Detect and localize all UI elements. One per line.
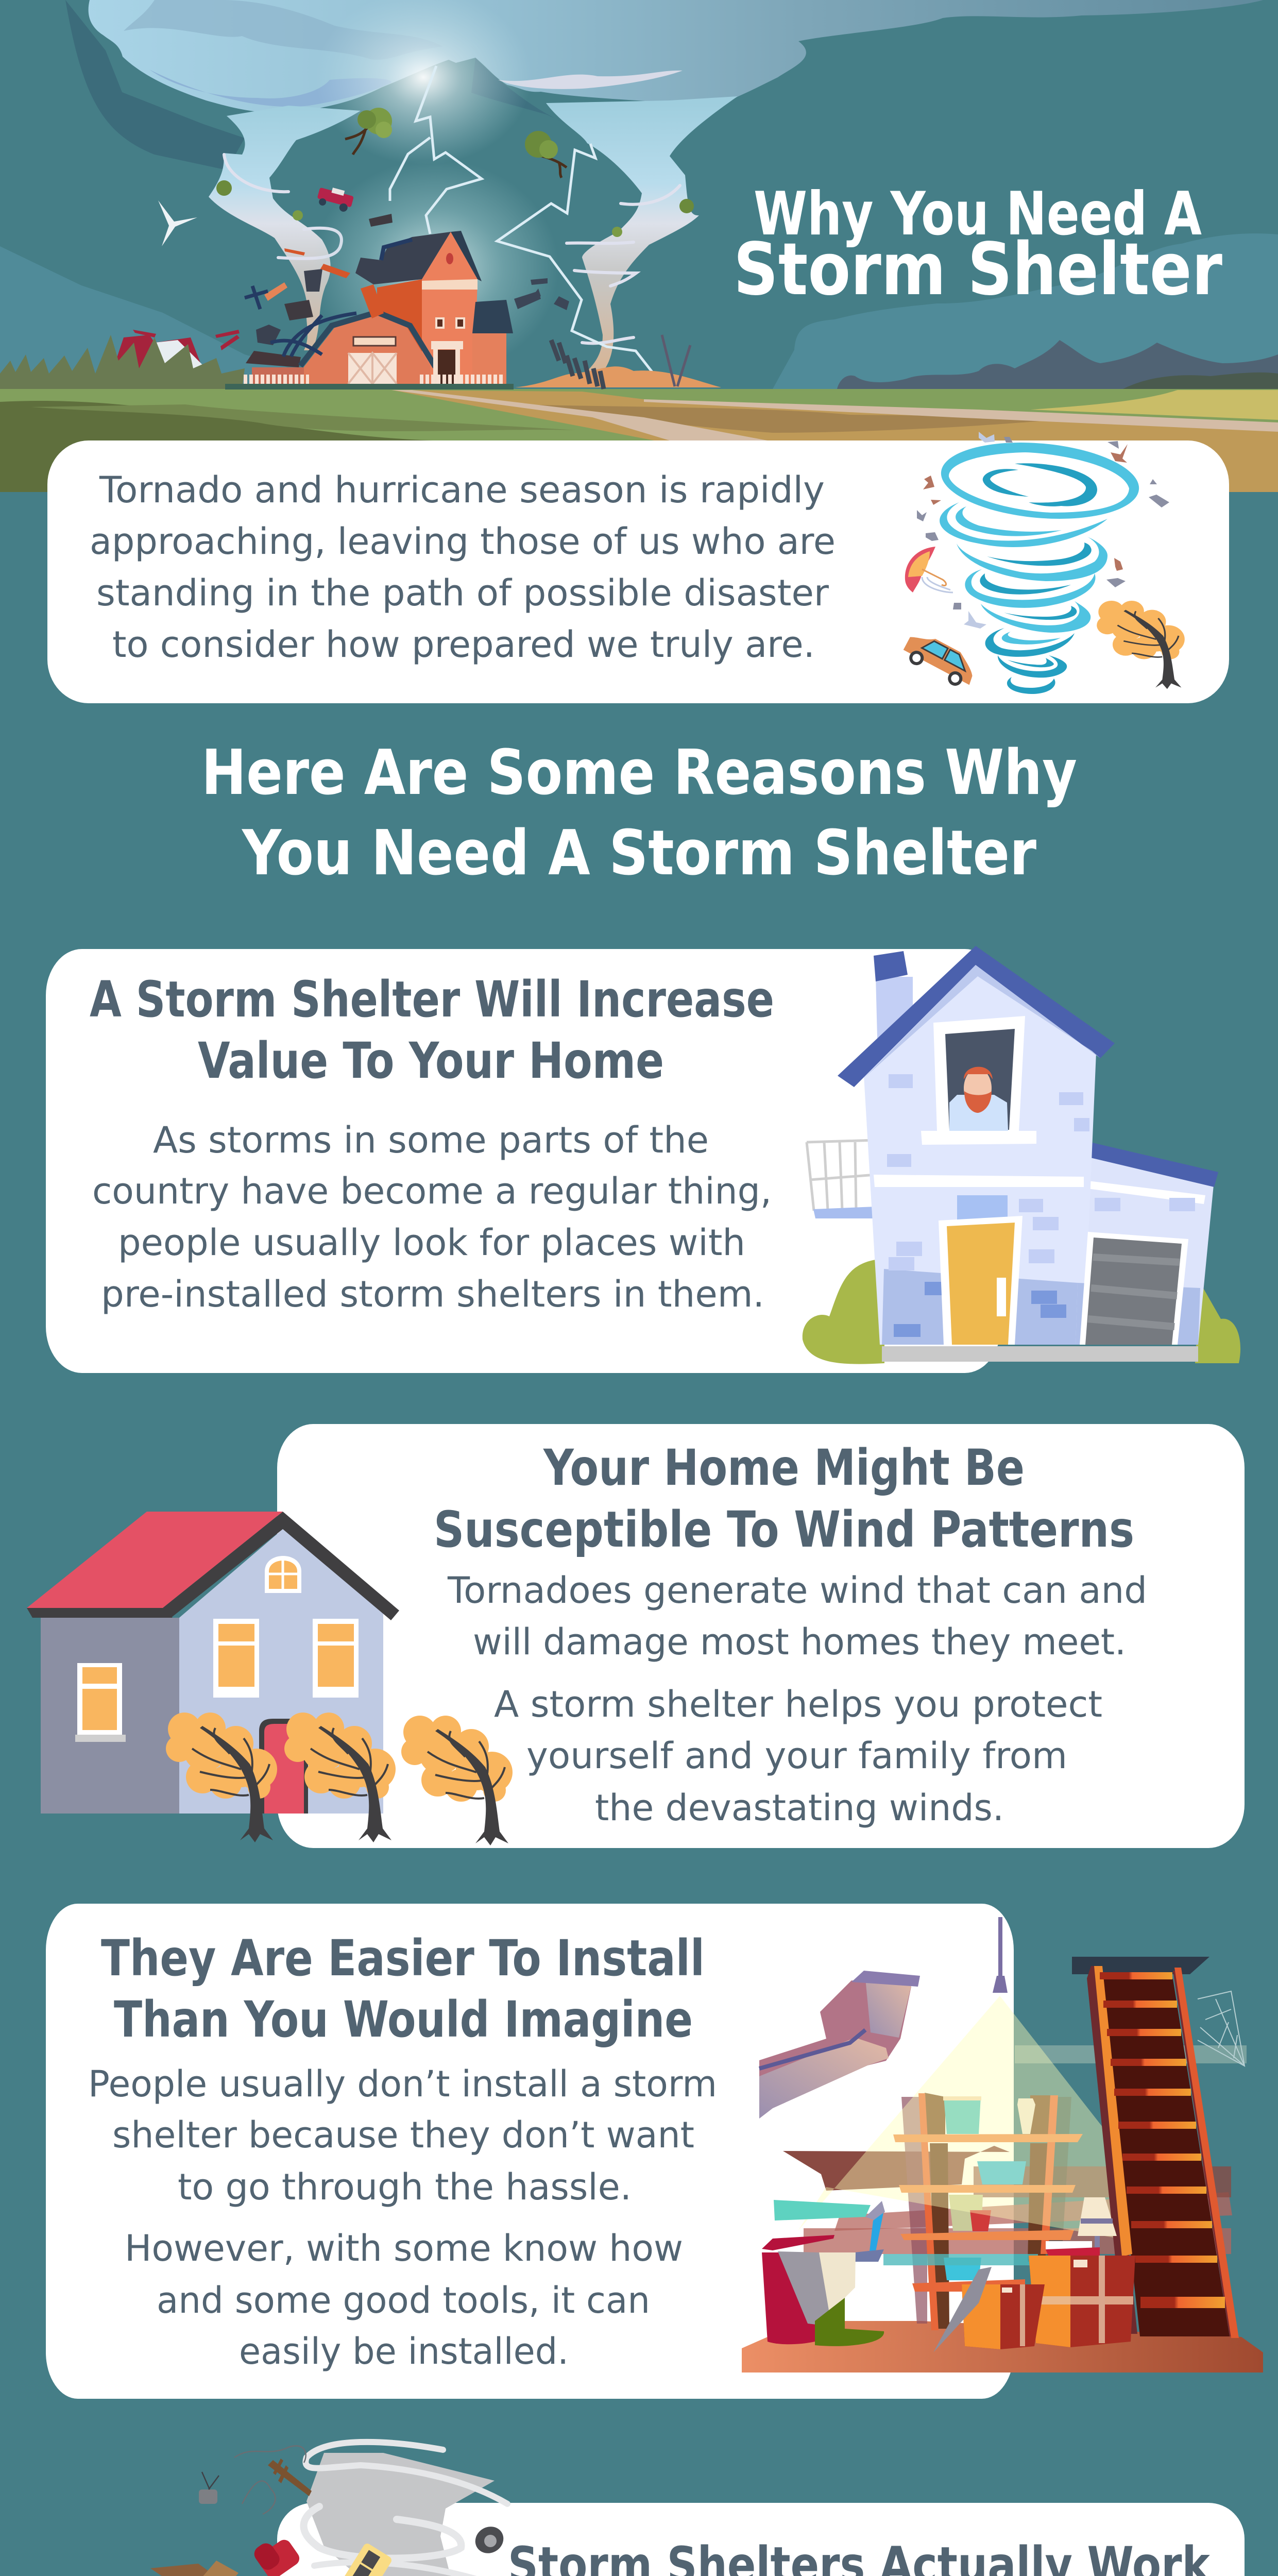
floor (742, 2321, 1263, 2372)
body text: shelter because they don’t want (112, 2114, 694, 2156)
books (1046, 2241, 1100, 2256)
intro text (90, 469, 836, 666)
heading: Than You Would Imagine (114, 1991, 693, 2048)
flying armchair (251, 2531, 302, 2576)
heading (101, 1929, 705, 2048)
card background (46, 1904, 1014, 2399)
flying utility pole (268, 2459, 312, 2496)
body text (447, 1569, 1147, 1829)
funnel wisps (224, 155, 680, 343)
body text: will damage most homes they meet. (473, 1621, 1126, 1663)
wrecked red barn (116, 330, 240, 376)
body text: the devastating winds. (595, 1787, 1004, 1829)
body text (88, 2063, 717, 2372)
left funnel (209, 106, 361, 350)
light glows (312, 0, 559, 376)
title (734, 179, 1222, 312)
hero illustration: tornado and barn (0, 0, 1278, 492)
intro text: standing in the path of possible disaster (96, 572, 829, 614)
flying red vehicle (315, 184, 355, 213)
panel: intro (47, 0, 1278, 703)
lamp (993, 1917, 1008, 1993)
icon: wind-blown tree (166, 1713, 277, 1842)
desk lamp (774, 2200, 1038, 2265)
icon: umbrella (905, 547, 953, 592)
jars and tubs (943, 2096, 1035, 2280)
right funnel (546, 96, 738, 372)
body text: country have become a regular thing, (92, 1170, 772, 1212)
icon: wind-blown tree (1097, 601, 1185, 689)
intro text: Tornado and hurricane season is rapidly (99, 469, 825, 511)
debris heap (515, 335, 721, 389)
body text: yourself and your family from (526, 1735, 1067, 1777)
illustration: blue house (803, 946, 1240, 1364)
body text (92, 1119, 772, 1315)
panel: increase value (46, 946, 1240, 1373)
intro card background (47, 440, 1229, 703)
light cone (798, 1996, 1201, 2253)
section heading: You Need A Storm Shelter (241, 818, 1036, 889)
body text: As storms in some parts of the (153, 1119, 709, 1161)
right distant bushes (837, 340, 1278, 389)
body text: pre-installed storm shelters in them. (101, 1273, 764, 1315)
ground (0, 389, 1278, 492)
card background (277, 1424, 1245, 1848)
flying debris (245, 214, 569, 357)
cardboard boxes (962, 2256, 1135, 2349)
icon: flying car (900, 628, 981, 691)
broken wall (783, 2045, 1247, 2254)
flying roof (150, 2561, 265, 2576)
heading: They Are Easier To Install (101, 1929, 705, 1987)
body text: Tornadoes generate wind that can and (447, 1569, 1147, 1612)
barn (225, 231, 514, 389)
body text: easily be installed. (239, 2330, 569, 2372)
heading: Your Home Might Be (543, 1439, 1025, 1497)
heading (90, 971, 774, 1090)
illustration: tornado over shelter (9, 2442, 535, 2576)
sky shading (0, 0, 1278, 389)
laundry bin (762, 2235, 884, 2346)
ladder (1072, 1957, 1239, 2338)
section heading: Here Are Some Reasons Why (201, 737, 1077, 809)
heading: Value To Your Home (198, 1032, 664, 1090)
storm cloud (89, 0, 1263, 124)
heading: Susceptible To Wind Patterns (434, 1501, 1134, 1558)
icon: wind-blown tree (284, 1713, 396, 1842)
body text: and some good tools, it can (157, 2279, 650, 2321)
wind turbine (158, 200, 197, 246)
umbrella (933, 2267, 992, 2352)
body text: A storm shelter helps you protect (494, 1683, 1102, 1725)
grey tornado (304, 2442, 507, 2576)
flying tyre (470, 2521, 508, 2558)
icon: wind-blown tree (401, 1716, 513, 1845)
flying school bus (332, 2542, 399, 2576)
table lamp (1078, 2197, 1117, 2252)
cobweb (1198, 1991, 1245, 2066)
body text: to go through the hassle. (178, 2166, 632, 2208)
left bushes (0, 335, 245, 389)
panel: easy install (46, 1904, 1263, 2399)
illustration: shelter storage room (742, 1917, 1263, 2372)
panel: shelters work (9, 2442, 1245, 2576)
intro text: to consider how prepared we truly are. (112, 623, 815, 666)
illustration: red-roof house (27, 1512, 399, 1814)
icon: tornado debris (917, 432, 1169, 629)
body text: However, with some know how (125, 2227, 683, 2269)
power lines (234, 2446, 535, 2576)
flying TV (199, 2472, 219, 2504)
card background (46, 949, 1001, 1373)
panel: wind patterns (27, 1424, 1245, 1848)
lightning bolts (390, 66, 654, 375)
card background (277, 2503, 1245, 2576)
flying trees (216, 108, 694, 237)
icon: blue tornado (940, 443, 1139, 694)
heading: A Storm Shelter Will Increase (90, 971, 774, 1028)
body text: People usually don’t install a storm (88, 2063, 717, 2105)
body text: people usually look for places with (118, 1222, 745, 1264)
shelves (893, 2093, 1083, 2330)
intro text: approaching, leaving those of us who are (90, 520, 836, 563)
section heading (201, 737, 1077, 889)
heading (434, 1439, 1134, 1558)
duct (759, 1971, 920, 2119)
